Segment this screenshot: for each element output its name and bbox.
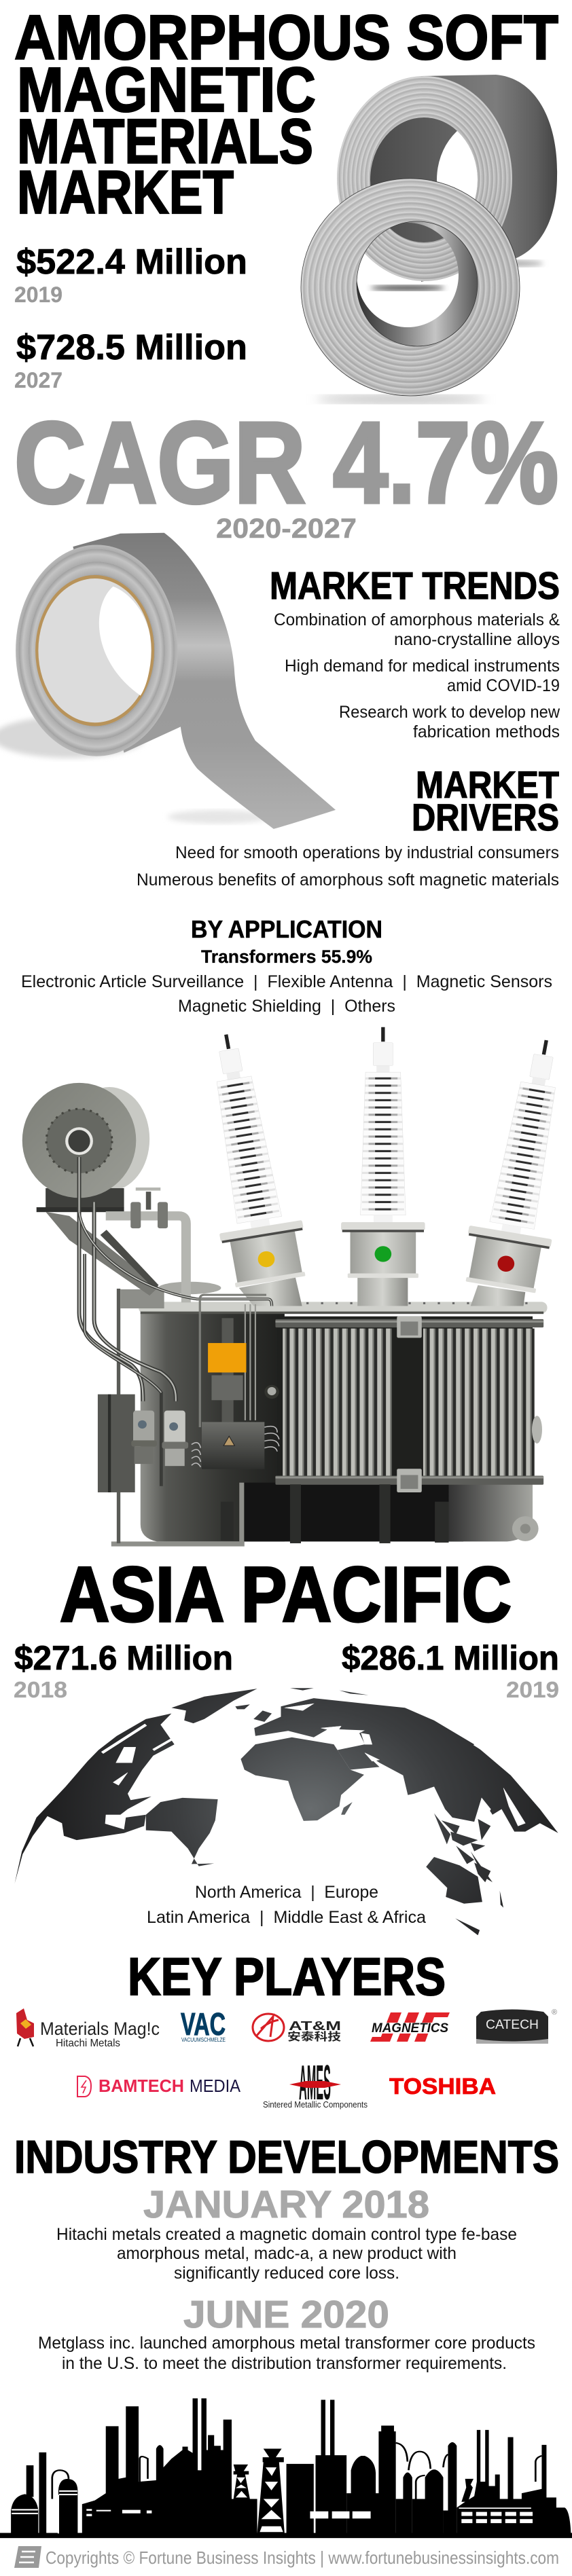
development: june 2020: in the U.S. to meet the distribution transformer requirements. — [62, 2354, 507, 2373]
development: june 2020 — [38, 2293, 535, 2373]
value: asia pacific 2018 — [14, 1639, 233, 1702]
warning panel — [192, 1318, 279, 1469]
logo: magnetics: MAGNETICS — [372, 2021, 448, 2036]
CAGR: 2020-2027 — [216, 513, 357, 544]
market value 2027 — [14, 328, 247, 392]
logo: vac: VACUUMSCHMELZE — [181, 2037, 226, 2043]
regions list: Latin America | Middle East & Africa — [147, 1908, 426, 1927]
logo: catech: ® — [552, 2008, 557, 2017]
market value 2019: $522.4 Million — [16, 242, 247, 282]
value: asia pacific 2019 — [342, 1639, 559, 1702]
image: tape roll — [0, 533, 336, 829]
logo: bamtech media: BAMTECH — [99, 2076, 184, 2096]
list: market drivers: Need for smooth operations by industrial consumers — [175, 843, 559, 862]
northern ice — [290, 1688, 314, 1691]
section: by application: Magnetic Shielding | Others — [178, 997, 395, 1016]
bushings — [185, 1027, 572, 1294]
list: market trends — [274, 610, 560, 741]
development: january 2018: significantly reduced core loss. — [174, 2264, 399, 2283]
logo: catech: CATECH — [486, 2018, 539, 2032]
list: market trends: Research work to develop new — [339, 703, 560, 722]
icon: fortune business insights logo — [14, 2546, 41, 2568]
value: asia pacific 2018: $271.6 Million — [14, 1639, 233, 1677]
development: january 2018: amorphous metal, madc-a, a new product with — [117, 2244, 457, 2263]
market value 2027: $728.5 Million — [16, 328, 247, 367]
value: asia pacific 2019: $286.1 Million — [342, 1639, 559, 1677]
market value 2027: 2027 — [14, 368, 62, 392]
heading: key players: KEY PLAYERS — [128, 1947, 446, 2006]
regions list — [147, 1883, 426, 1927]
control cabinet and relays — [98, 1395, 188, 1492]
value: asia pacific 2019: 2019 — [506, 1677, 559, 1702]
title: MATERIALS — [17, 106, 313, 177]
list: market drivers: Numerous benefits of amorphous soft magnetic materials — [137, 870, 559, 889]
support and piping — [37, 1157, 272, 1486]
image: world map globe — [14, 1688, 558, 1935]
uk and iceland — [253, 1710, 272, 1722]
africa — [240, 1737, 364, 1821]
coil shadow — [370, 285, 445, 291]
skyline illustration — [0, 2398, 572, 2538]
logo: bamtech media: MEDIA — [190, 2076, 241, 2096]
front coil — [301, 179, 520, 396]
north america — [14, 1714, 175, 1883]
list: market trends: Combination of amorphous materials & — [274, 610, 560, 629]
list: market trends: nano-crystalline alloys — [394, 630, 560, 649]
list: market drivers — [137, 843, 559, 889]
market value 2019 — [14, 242, 247, 307]
logo: materials magic: Materials Mag!c — [40, 2019, 160, 2039]
development: january 2018 — [56, 2183, 517, 2283]
title: MARKET — [17, 159, 234, 227]
logo: toshiba: TOSHIBA — [389, 2074, 496, 2099]
australia — [426, 1857, 482, 1904]
list: market trends: fabrication methods — [413, 722, 560, 741]
development: january 2018: Hitachi metals created a magnetic domain control type fe-base — [56, 2225, 517, 2244]
insulator necks — [239, 1278, 525, 1306]
radiators — [275, 1317, 543, 1492]
logo: bamtech media — [77, 2076, 241, 2097]
section: by application: Electronic Article Surveillance | Flexible Antenna | Magnetic Sensors — [21, 972, 552, 991]
logo: catech — [476, 2008, 557, 2044]
logo: materials magic: Hitachi Metals — [56, 2038, 120, 2049]
regions list: North America | Europe — [195, 1883, 378, 1902]
back coil — [337, 75, 557, 282]
logo: magnetics — [370, 2012, 450, 2042]
conservator — [22, 1083, 149, 1208]
logo: ames: Sintered Metallic Components — [263, 2099, 368, 2110]
greenland — [171, 1689, 257, 1723]
logo: at&m: 安泰科技 — [287, 2030, 341, 2043]
madagascar — [341, 1802, 353, 1815]
heading: asia pacific: ASIA PACIFIC — [60, 1551, 512, 1638]
logo: at&m — [253, 2014, 341, 2043]
value: asia pacific 2018: 2018 — [14, 1677, 67, 1702]
logo: vac — [181, 2006, 226, 2043]
feet and frame — [111, 1289, 539, 1547]
market value 2019: 2019 — [14, 282, 62, 307]
water gaps — [102, 1704, 525, 1826]
section: by application: Transformers 55.9% — [201, 946, 372, 967]
indicator dots — [258, 1246, 514, 1272]
text: AMES — [299, 2056, 331, 2110]
title: MAGNETIC — [17, 54, 316, 125]
logo: materials magic — [16, 2008, 160, 2049]
new zealand — [455, 1918, 480, 1935]
section: by application — [21, 915, 552, 1016]
logo: vac: VAC — [181, 2006, 226, 2042]
image: transformer — [22, 1027, 572, 1547]
eurasia — [254, 1698, 558, 1833]
list: market trends: amid COVID-19 — [447, 676, 560, 695]
logo: at&m: AT&M — [289, 2019, 341, 2033]
section: by application: BY APPLICATION — [191, 915, 382, 943]
south america — [146, 1798, 218, 1866]
development: june 2020: Metglass inc. launched amorphous metal transformer core products — [38, 2334, 535, 2353]
asia islands — [434, 1814, 450, 1844]
logo: ames — [263, 2056, 368, 2110]
list: market trends: High demand for medical instruments — [285, 657, 560, 676]
heading: market drivers — [412, 763, 559, 839]
lid — [120, 1282, 547, 1314]
image: metal coils — [301, 75, 557, 403]
development: june 2020: JUNE 2020 — [183, 2293, 389, 2336]
development: january 2018: JANUARY 2018 — [143, 2183, 429, 2226]
tank — [141, 1313, 533, 1541]
title — [14, 2, 558, 227]
